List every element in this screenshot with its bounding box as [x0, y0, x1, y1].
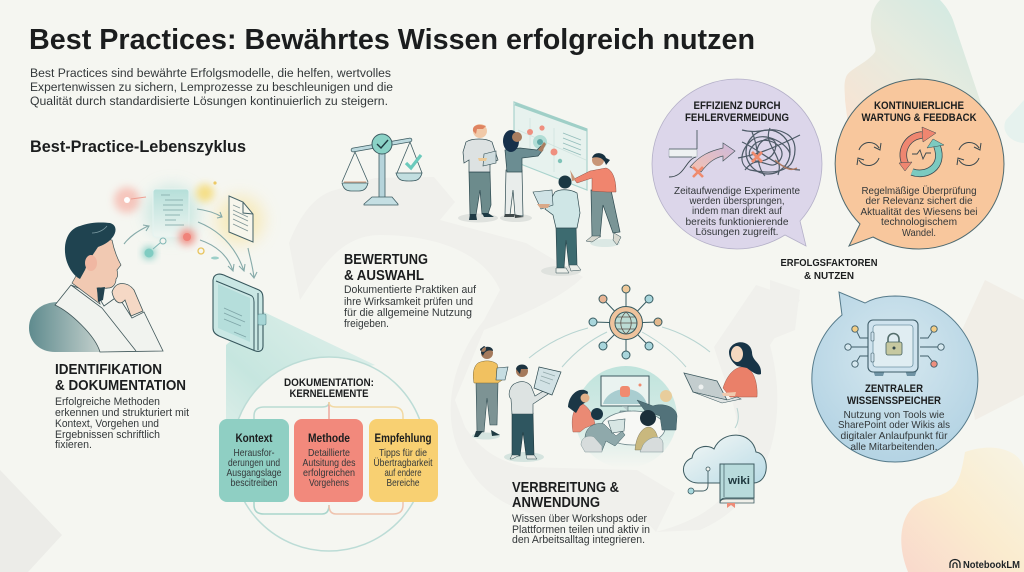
- card: empfehlung: [369, 419, 438, 502]
- bubble: central knowledge store: ZENTRALER: [865, 383, 923, 395]
- card: methode: Autsitung des: [302, 457, 356, 469]
- bubble: maintenance: Regelmäßige Überprüfung: [862, 185, 977, 197]
- bubble: maintenance: Aktualität des Wiesens bei: [860, 206, 978, 218]
- intro paragraph: [30, 66, 393, 108]
- icon: safe with circuit lines: [845, 320, 944, 376]
- ring: [232, 357, 426, 551]
- bubble: efficiency: EFFIZIENZ DURCH: [694, 100, 781, 112]
- heading: verbreitung: VERBREITUNG &: [512, 480, 619, 496]
- panel: dissemination and application: [472, 285, 766, 546]
- dashboard board: [514, 102, 587, 190]
- bubble: maintenance: der Relevanz sichert die: [866, 195, 973, 207]
- panel: identification and documentation: [29, 181, 266, 451]
- heading: identifikation: [55, 362, 186, 394]
- heading: identifikation: IDENTIFIKATION: [55, 362, 162, 378]
- red arrow: [899, 127, 936, 171]
- panel: success factors: [652, 79, 1004, 462]
- text: verbreitung body: den Arbeitsalltag integrieren.: [512, 534, 645, 546]
- bubble: efficiency: indem man direkt auf: [692, 205, 782, 217]
- icon: tangled knot: [738, 128, 800, 176]
- person: blond man: [637, 390, 677, 430]
- heading: verbreitung: ANWENDUNG: [512, 495, 600, 511]
- text: bewertung body: Dokumentierte Praktiken auf: [344, 284, 477, 296]
- card: kontext: Herausfor-: [234, 447, 275, 459]
- bubble: efficiency: FEHLERVERMEIDUNG: [685, 112, 789, 124]
- text: bewertung body: ihre Wirksamkeit prüfen und: [344, 296, 473, 308]
- illustration: team at dashboard: [458, 102, 621, 276]
- label: erfolgsfaktoren: & NUTZEN: [804, 271, 854, 282]
- card: kontext: Ausgangslage: [226, 467, 282, 479]
- heading: kernelemente: KERNELEMENTE: [290, 388, 368, 400]
- icon: wiki cloud: [683, 435, 766, 508]
- card: empfehlung: auf endere: [384, 467, 422, 479]
- heading: bewertung: [344, 252, 428, 284]
- icon: knowledge sources to folder: [114, 181, 266, 351]
- screen: [601, 376, 649, 413]
- heading: kernelemente: DOKUMENTATION:: [284, 377, 374, 389]
- card: kontext: bescitreiben: [230, 477, 278, 489]
- bubble: maintenance: WARTUNG & FEEDBACK: [862, 112, 977, 124]
- bubble: efficiency: Zeitaufwendige Experimente: [674, 185, 800, 197]
- icon: thinking man: [29, 222, 163, 352]
- heading: kernelemente: [284, 377, 374, 400]
- bubble: central knowledge store: digitaler Anlaufpunkt für: [840, 430, 948, 442]
- bubble: central knowledge store: WISSENSSPEICHER: [847, 395, 941, 407]
- text: identifikation body: Ergebnissen schriftlich: [55, 429, 160, 441]
- logo: NotebookLM: NotebookLM: [963, 560, 1020, 571]
- text: verbreitung body: Wissen über Workshops oder: [512, 513, 647, 525]
- text: identifikation body: Erfolgreiche Methoden: [55, 396, 160, 408]
- section heading: lifecycle: Best-Practice-Lebenszyklus: [30, 138, 246, 156]
- title: Best Practices: Bewährtes Wissen erfolgreich nutzen: [29, 24, 755, 56]
- bubble: central knowledge store: alle Mitarbeitenden.: [850, 441, 938, 453]
- text: bewertung body: freigeben.: [344, 318, 389, 330]
- teal arrow: [912, 139, 944, 173]
- intro paragraph: Best Practices sind bewährte Erfolgsmodelle, die helfen, wertvolles: [30, 66, 391, 80]
- panel: core elements of documentation: [219, 357, 438, 551]
- text: bewertung body: für die allgemeine Nutzung: [344, 307, 472, 319]
- icon: shortcut arrow: [669, 130, 735, 177]
- icon: network hub: [589, 285, 662, 359]
- label: erfolgsfaktoren: [780, 258, 878, 282]
- person: man with tablet at table: [585, 408, 625, 451]
- illustration: meeting around screen: [568, 366, 677, 468]
- bubble: efficiency: werden übersprungen,: [689, 195, 784, 207]
- heading: bewertung: BEWERTUNG: [344, 252, 428, 268]
- text: verbreitung body: [512, 513, 650, 546]
- icon: refresh cycle: [857, 127, 981, 173]
- card: empfehlung: Tipps für die: [379, 447, 427, 459]
- text: verbreitung body: Plattformen teilen und aktiv in: [512, 524, 650, 536]
- card: methode: [294, 419, 363, 502]
- card: methode: Methode: [308, 431, 350, 445]
- person: man with tablet: [504, 364, 561, 462]
- label: erfolgsfaktoren: ERFOLGSFAKTOREN: [780, 258, 878, 269]
- card: methode: Detaillierte: [308, 447, 350, 459]
- intro paragraph: Qualität durch standardisierte Lösungen kontinuierlich zu steigern.: [30, 94, 388, 108]
- text: identifikation body: [55, 396, 189, 451]
- person: woman with laptop: [684, 342, 761, 403]
- card: kontext: [219, 419, 289, 502]
- card: methode: erfolgreichen: [303, 467, 355, 479]
- icon: balance scale: [342, 134, 422, 205]
- card: methode: Vorgehens: [309, 477, 349, 489]
- icon: wiki cloud: wiki: [727, 475, 750, 487]
- text: identifikation body: Kontext, Vorgehen und: [55, 418, 159, 430]
- text: identifikation body: fixieren.: [55, 439, 92, 451]
- person: woman pointing: [500, 130, 546, 222]
- bubble: central knowledge store: [812, 292, 978, 462]
- chairs: [581, 436, 663, 452]
- person: man with tablet: [458, 124, 498, 222]
- bubble: maintenance: technologischem: [881, 216, 957, 228]
- heading: verbreitung: [512, 480, 619, 511]
- bubble: maintenance: [835, 79, 1004, 249]
- intro paragraph: Expertenwissen zu sichern, Lemprozesse zu beschleunigen und die: [30, 80, 393, 94]
- card: empfehlung: Bereiche: [386, 477, 420, 489]
- person: woman in coral top: [570, 153, 621, 247]
- card: empfehlung: Empfehlung: [374, 431, 432, 445]
- card: kontext: derungen und: [228, 457, 280, 469]
- person: woman in yellow: [472, 346, 508, 440]
- person: seated man from behind: [635, 410, 658, 450]
- connecting arcs: [529, 327, 738, 428]
- text: identifikation body: erkennen und strukturiert mit: [55, 407, 189, 419]
- bubble: efficiency: Lösungen zugreift.: [696, 226, 778, 238]
- panel: evaluation and selection: [342, 102, 621, 330]
- bubble: efficiency: [652, 79, 822, 249]
- heading: bewertung: & AUSWAHL: [344, 268, 424, 284]
- person: man with tablet from behind: [533, 176, 581, 276]
- bubble: central knowledge store: SharePoint oder Wikis als: [838, 419, 950, 431]
- bubble: central knowledge store: Nutzung von Tools wie: [844, 409, 945, 421]
- card: empfehlung: Übertragbarkeit: [374, 457, 433, 469]
- bubble: maintenance: KONTINUIERLICHE: [874, 100, 964, 112]
- card: kontext: Kontext: [236, 431, 272, 445]
- text: bewertung body: [344, 284, 477, 330]
- person: woman left: [568, 390, 595, 432]
- bubble: efficiency: bereits funktionierende: [686, 216, 789, 228]
- connectors: [254, 402, 403, 514]
- bubble: maintenance: Wandel.: [902, 227, 936, 239]
- heading: identifikation: & DOKUMENTATION: [55, 378, 186, 394]
